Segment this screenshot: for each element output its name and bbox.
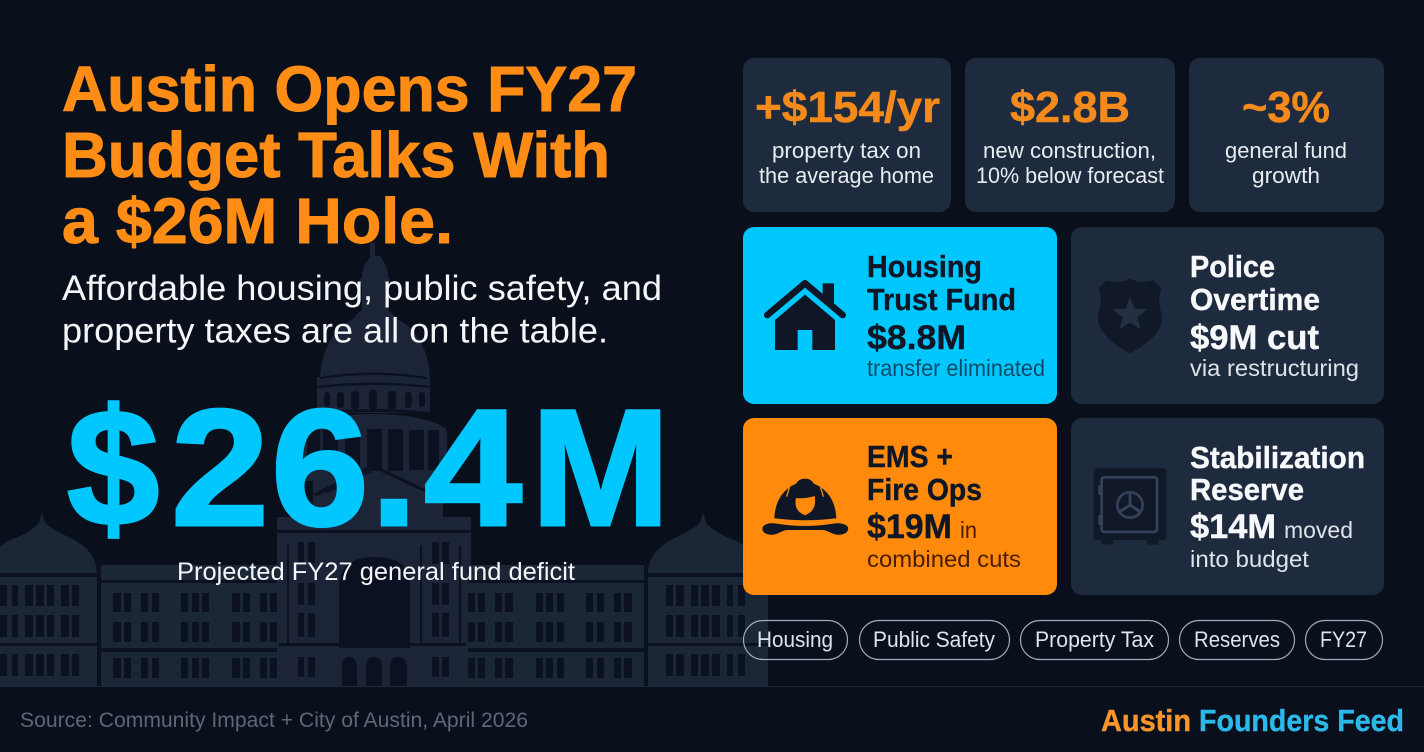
stat card: new construction: $2.8B: [1010, 83, 1130, 132]
tag: FY27: FY27: [1320, 627, 1367, 652]
panel: housing trust fund: Housing: [867, 249, 982, 284]
subtitle: property taxes are all on the table.: [62, 312, 608, 350]
subtitle: [62, 269, 662, 350]
icon: safe: [1094, 468, 1166, 545]
title: [62, 53, 637, 257]
big deficit number: 4: [424, 376, 522, 561]
big deficit number: .: [371, 376, 417, 561]
tag: property tax: [1020, 620, 1168, 660]
icon: police badge: [1098, 278, 1162, 353]
panel: EMS and fire ops: [743, 418, 1057, 595]
big deficit number: 6: [271, 376, 369, 561]
brand logo: Founders Feed: [1199, 703, 1404, 738]
capitol building silhouette: [0, 243, 768, 686]
icon: firefighter helmet: [762, 479, 848, 535]
panel: housing trust fund: $8.8M: [867, 319, 966, 357]
tag: FY27: [1306, 620, 1382, 660]
brand logo: Austin: [1101, 703, 1191, 738]
tag: housing: [744, 620, 848, 660]
title: Budget Talks With: [62, 119, 610, 191]
panel: housing trust fund: Trust Fund: [867, 282, 1016, 317]
panel: police overtime: Overtime: [1190, 282, 1320, 317]
stat card: property tax: [743, 58, 951, 212]
tag: housing: Housing: [757, 627, 833, 652]
left wing and tower: [0, 512, 279, 686]
panel: police overtime: $9M cut: [1190, 319, 1319, 357]
stat card: general fund growth: ~3%: [1242, 83, 1330, 132]
title: a $26M Hole.: [62, 185, 453, 257]
stat card: general fund growth: general fund: [1225, 138, 1347, 163]
big deficit number: $: [67, 376, 159, 561]
panel: stabilization reserve: into budget: [1190, 546, 1310, 572]
panel: EMS and fire ops: Fire Ops: [867, 472, 982, 507]
tag: public safety: [860, 620, 1010, 660]
stat card: general fund growth: [1189, 58, 1384, 212]
brand logo: [1101, 703, 1404, 738]
panel: EMS and fire ops: combined cuts: [867, 546, 1021, 572]
stat card: general fund growth: growth: [1252, 163, 1320, 188]
tag: public safety: Public Safety: [873, 627, 995, 652]
icon: house: [767, 283, 843, 350]
panel: stabilization reserve: moved: [1284, 517, 1353, 543]
big deficit number: M: [531, 376, 670, 561]
panel: stabilization reserve: $14M: [1190, 508, 1276, 546]
panel: housing trust fund: transfer eliminated: [867, 355, 1045, 381]
stat card: property tax: +$154/yr: [755, 83, 940, 132]
panel: stabilization reserve: [1071, 418, 1384, 595]
tag: property tax: Property Tax: [1035, 627, 1154, 652]
right wing and tower: [466, 512, 768, 686]
subtitle: Affordable housing, public safety, and: [62, 269, 662, 308]
panel: stabilization reserve: Stabilization: [1190, 440, 1365, 475]
stat card: property tax: the average home: [759, 163, 934, 188]
tag: reserves: Reserves: [1194, 627, 1280, 652]
source line: Source: Community Impact + City of Austin, April 2026: [20, 709, 528, 732]
panel: EMS and fire ops: EMS +: [867, 439, 953, 474]
capitol dome and centre block: [275, 243, 472, 686]
panel: police overtime: via restructuring: [1190, 355, 1359, 381]
panel: police overtime: [1071, 227, 1384, 404]
tag: reserves: [1180, 620, 1294, 660]
deficit caption: Projected FY27 general fund deficit: [177, 558, 575, 586]
panel: EMS and fire ops: in: [960, 517, 977, 543]
stat card: property tax: property tax on: [772, 138, 921, 163]
stat card: new construction: [965, 58, 1175, 212]
panel: police overtime: Police: [1190, 249, 1275, 284]
stat card: new construction: 10% below forecast: [976, 163, 1164, 188]
big deficit number: 2: [171, 376, 269, 561]
panel: EMS and fire ops: $19M: [867, 508, 952, 546]
title: Austin Opens FY27: [62, 53, 637, 125]
stat card: new construction: new construction,: [983, 138, 1156, 163]
panel: stabilization reserve: Reserve: [1190, 472, 1304, 507]
panel: housing trust fund: [743, 227, 1057, 404]
tags: [744, 620, 1382, 660]
